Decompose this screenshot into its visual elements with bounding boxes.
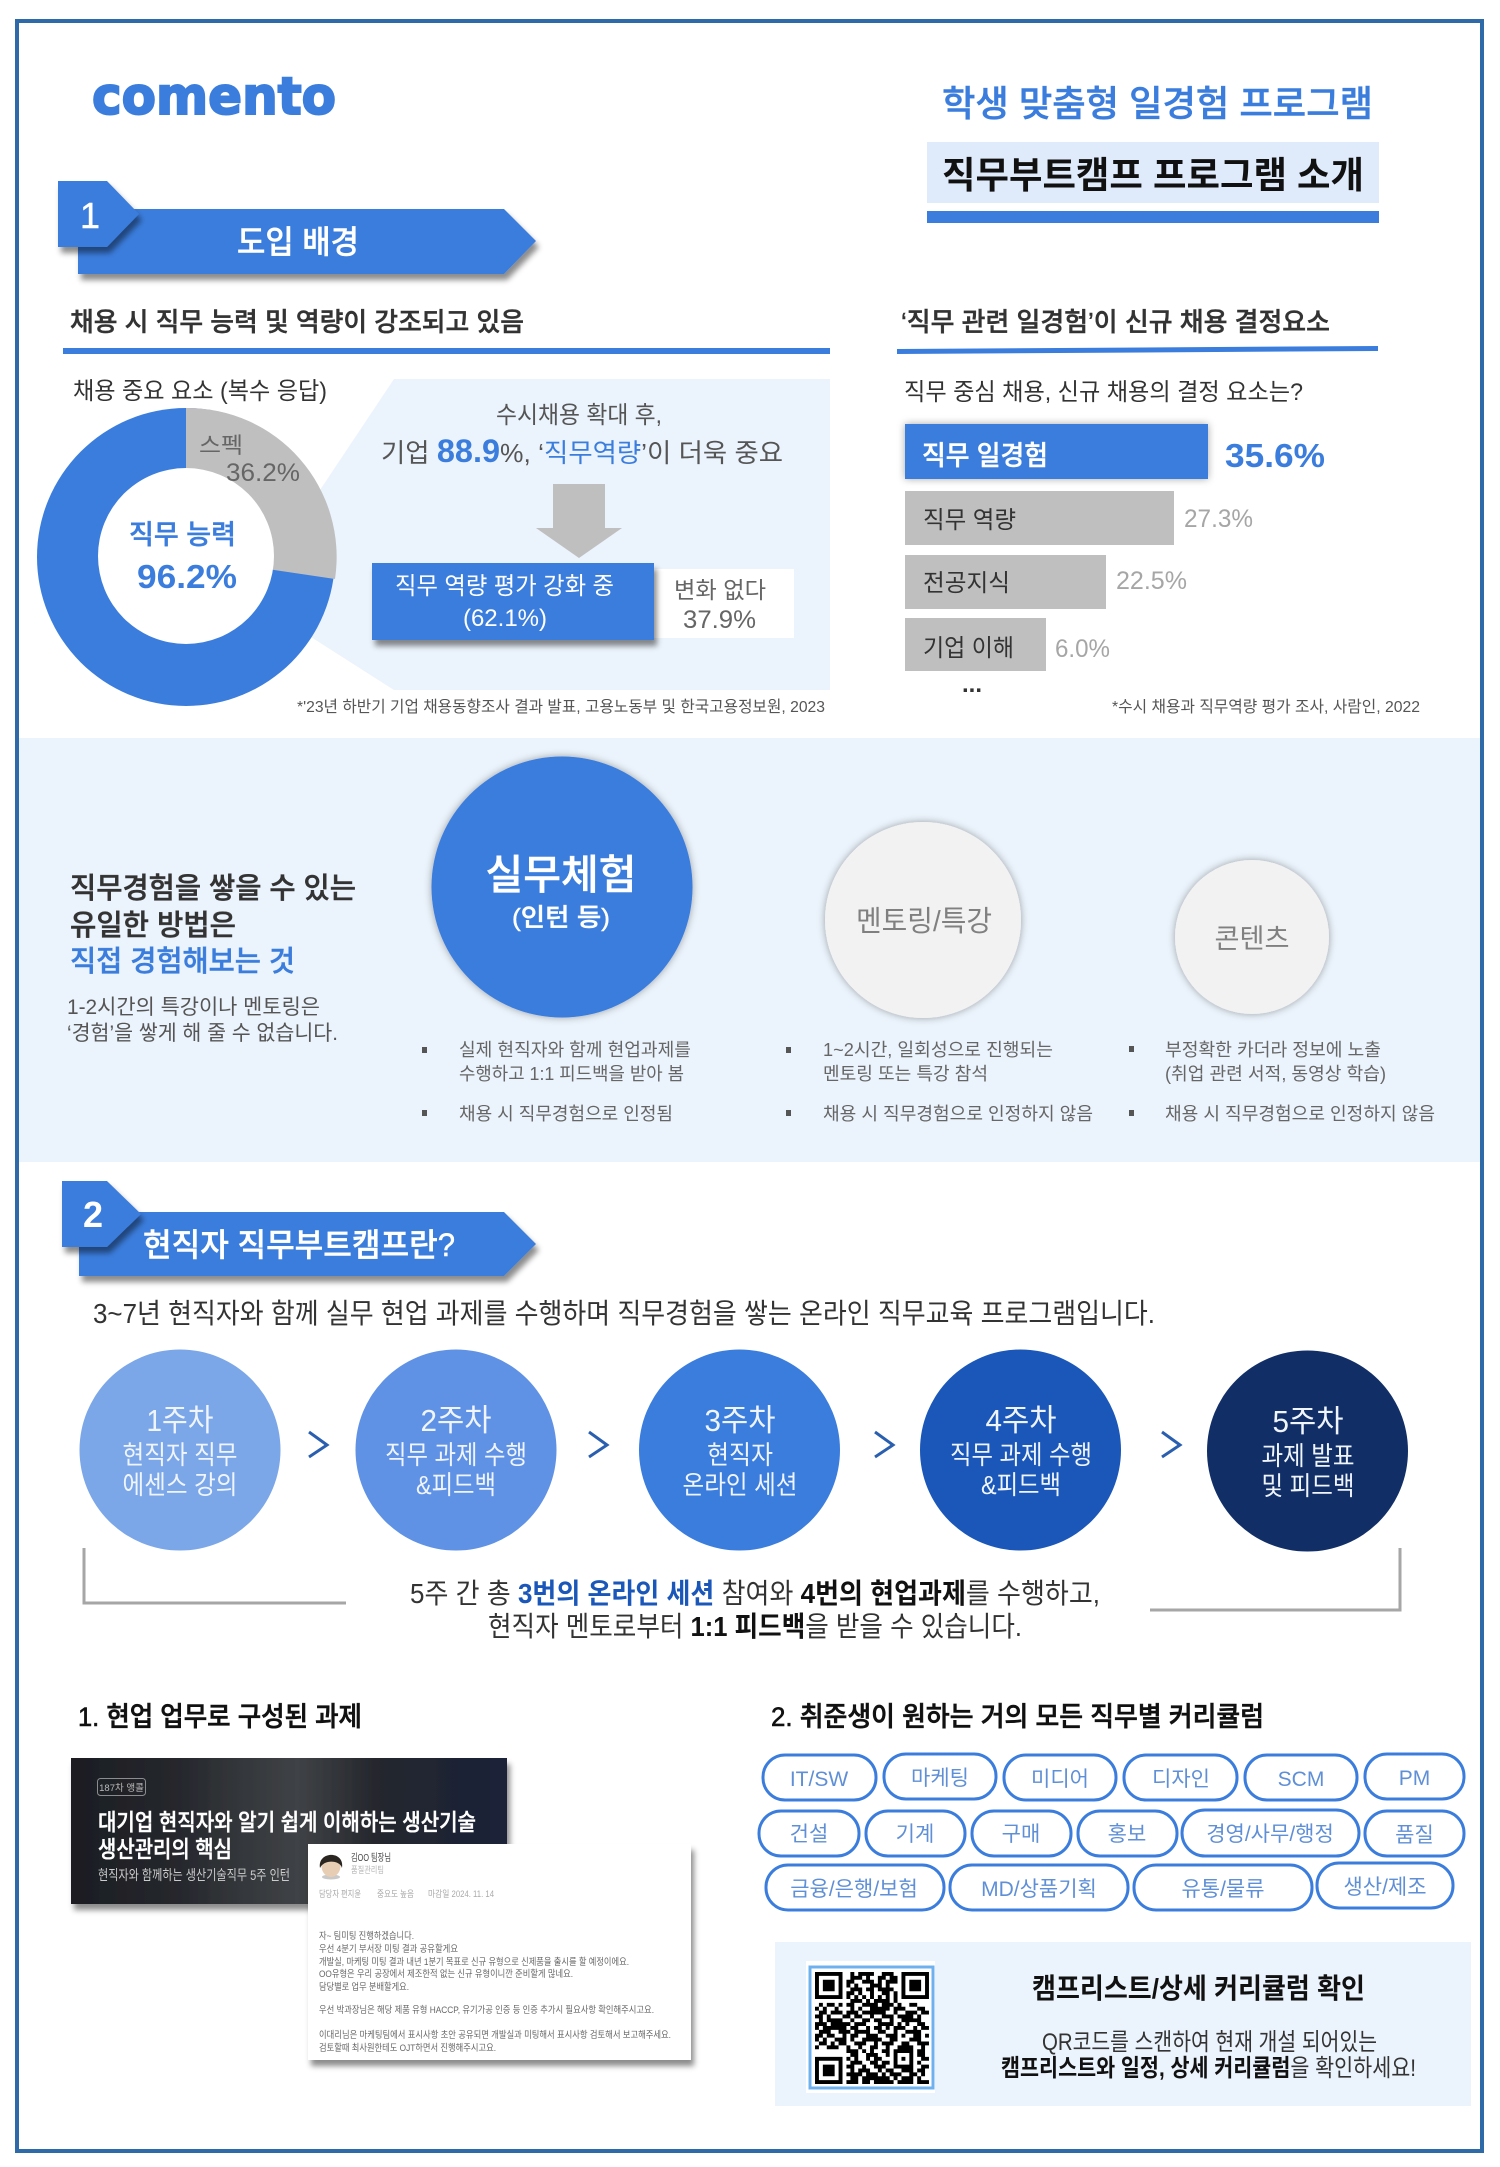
title box [927,142,1379,203]
task card: 담당별로 업무 분배할게요. [319,1981,409,1993]
banner label: 도입 배경 [237,224,359,260]
week 3: 온라인 세션 [682,1470,798,1500]
bullets: mentoring: 1~2시간, 일회성으로 진행되는 [823,1040,1053,1060]
section 2 intro: 3~7년 현직자와 함께 실무 현업 과제를 수행하며 직무경험을 쌓는 온라인 직무교육 프로그램입니다. [93,1298,1155,1329]
task card: 우선 4분기 부서장 미팅 결과 공유할게요 [319,1944,458,1955]
band: experience comparison [19,738,1480,1162]
arrow: week 4 to 5 [1162,1432,1180,1457]
course subtitle: 현직자와 함께하는 생산기술직무 5주 인턴 [98,1867,290,1883]
tag row 3: 유통/물류 [1181,1878,1265,1901]
number tab [62,1181,141,1247]
logo: comento: comento [92,67,336,127]
donut chart [37,408,337,706]
bar chart: 전공지식 [923,570,1010,597]
callout text: 기업 88.9%, ‘직무역량’이 더욱 중요 [381,433,783,469]
callout text [381,402,783,469]
bracket: left [84,1548,346,1603]
arrow: week 2 to 3 [589,1432,607,1457]
bar chart: 기업 이해 [923,635,1014,662]
course banner: 생산관리의 핵심 [98,1836,232,1862]
tag row 1: 미디어 [1031,1768,1089,1791]
week 3 [639,1350,840,1550]
bar chart: 직무 역량 [923,507,1016,534]
result box: no change: 37.9% [683,606,756,634]
result box: no change: 변화 없다 [674,577,766,603]
circle: internship: 실무체험 [486,852,636,898]
bullets: contents [1129,1040,1435,1124]
tag row 2: 홍보 [1108,1823,1146,1846]
bar: major knowledge [905,555,1106,609]
bar: competency [905,491,1174,545]
meta row: 중요도 높음 [377,1889,414,1899]
donut chart label: 채용 중요 요소 (복수 응답) [73,378,327,405]
ellipsis: ... [962,671,982,698]
task card [308,1844,691,2060]
title: program label: 학생 맞춤형 일경험 프로그램 [942,83,1373,124]
banner bar [78,209,536,274]
callout wedge panel [300,379,830,690]
week 5: 5주차 [1272,1404,1344,1439]
donut label: competency: 직무 능력 [129,520,236,550]
course banner: 187차 앵콜 [99,1782,144,1794]
banner label: 현직자 직무부트캠프란? [143,1227,455,1263]
heading: new hire factors: ‘직무 관련 일경험’이 신규 채용 결정요소 [901,307,1330,337]
tag row 2: 경영/사무/행정 [1206,1823,1334,1846]
program summary: 현직자 멘토로부터 1:1 피드백을 받을 수 있습니다. [488,1611,1022,1642]
course banner [71,1758,507,1904]
course title: 대기업 현직자와 알기 쉽게 이해하는 생산기술 [98,1809,476,1835]
QR code [806,1961,935,2093]
week 4: 4주차 [986,1403,1056,1438]
week 2: 2주차 [420,1403,492,1438]
donut value: competency: 96.2% [137,558,237,595]
bullets: internship [422,1040,691,1124]
title block [927,83,1379,223]
bar chart: 6.0% [1055,635,1110,663]
arrow: down [536,484,622,558]
heading: assignments: 1. 현업 업무로 구성된 과제 [78,1702,362,1732]
badge [98,1778,146,1796]
footnote: right source: *수시 채용과 직무역량 평가 조사, 사람인, 2022 [1112,698,1420,716]
meta row: 마감일 2024. 11. 14 [428,1888,494,1899]
title: program intro: 직무부트캠프 프로그램 소개 [942,155,1364,196]
QR panel: 캠프리스트와 일정, 상세 커리큘럼을 확인하세요! [1001,2055,1416,2082]
bar chart: 22.5% [1116,567,1187,595]
result box: strengthened [372,563,654,640]
week 1: 현직자 직무 [122,1440,238,1470]
bar chart: 35.6% [1225,437,1325,474]
meta row [319,1888,494,1899]
circle: internship [432,756,692,1018]
week 5: 및 피드백 [1262,1471,1354,1501]
number 2: 2 [83,1194,103,1235]
band description: 1-2시간의 특강이나 멘토링은 [67,996,320,1019]
QR description: QR코드를 스캔하여 현재 개설 되어있는 [1042,2029,1377,2056]
heading: curriculum: 2. 취준생이 원하는 거의 모든 직무별 커리큘럼 [771,1702,1264,1732]
result box: strengthened: 직무 역량 평가 강화 중 [395,573,614,600]
bullets: internship: 수행하고 1:1 피드백을 받아 봄 [459,1064,684,1084]
tag row 2: 기계 [896,1823,934,1846]
band heading: 직접 경험해보는 것 [70,945,295,978]
tag row 3: MD/상품기획 [981,1878,1097,1901]
week 5 [1207,1350,1408,1552]
week 2: &피드백 [416,1470,496,1500]
tag row 3: 생산/제조 [1343,1876,1427,1899]
heading: new hire factors [897,307,1378,354]
tag row 1: 디자인 [1152,1768,1210,1791]
task card: OO유형은 우리 공장에서 제조한적 없는 신규 유형이니깐 준비할게 많네요. [319,1968,573,1980]
week 1: 1주차 [146,1403,214,1438]
band heading [70,872,356,978]
QR heading: 캠프리스트/상세 커리큘럼 확인 [1032,1973,1365,2004]
bullets: internship: 채용 시 직무경험으로 인정됨 [459,1104,673,1124]
week 2: 직무 과제 수행 [385,1440,527,1470]
title underline [927,211,1379,223]
banner bar [79,1212,536,1276]
week 3: 3주차 [704,1403,776,1438]
number tab [58,181,139,247]
message: 자~ 팀미팅 진행하겠습니다. [319,1930,414,1942]
week 4: 직무 과제 수행 [950,1440,1092,1470]
bullets: mentoring [786,1040,1093,1124]
tag row 2: 구매 [1002,1823,1040,1846]
bar chart: 직무 일경험 [922,441,1048,471]
bullets: mentoring: 멘토링 또는 특강 참석 [823,1064,988,1084]
arrow: week 1 to 2 [309,1432,327,1457]
band heading: 직무경험을 쌓을 수 있는 [70,872,356,905]
bullets: contents: 채용 시 직무경험으로 인정하지 않음 [1165,1104,1435,1124]
bracket: right [1150,1548,1400,1610]
task card: 우선 박과장님은 해당 제품 유형 HACCP, 유기가공 인증 등 인증 추가시 필요사항 확인해주시고요. [319,2004,654,2016]
week 5: 과제 발표 [1262,1441,1354,1471]
tag row 2: 건설 [790,1823,828,1846]
heading: hiring competency: 채용 시 직무 능력 및 역량이 강조되고 있음 [70,307,524,337]
band description: ‘경험’을 쌓게 해 줄 수 없습니다. [67,1022,338,1045]
number 1: 1 [80,195,100,236]
bullets: internship: 실제 현직자와 함께 현업과제를 [459,1040,691,1060]
circle: internship: (인턴 등) [512,904,610,932]
bar: company understanding [905,618,1046,671]
bar chart title: 직무 중심 채용, 신규 채용의 결정 요소는? [904,379,1303,406]
job tags [759,1754,1464,1910]
tag row 1: 마케팅 [911,1767,969,1790]
circle: contents [1175,860,1329,1014]
band description [67,996,338,1045]
circle: mentoring: 멘토링/특강 [856,906,992,938]
week 1 [80,1350,280,1550]
week 1: 에센스 강의 [122,1470,238,1500]
bullets: contents: 부정확한 카더라 정보에 노출 [1165,1040,1381,1060]
band heading: 유일한 방법은 [70,909,236,942]
author: 김OO 팀장님 [351,1852,391,1864]
task card: 개발실, 마케팅 미팅 결과 내년 1분기 목표로 신규 유형으로 신제품을 출시를 할 예정이에요. [319,1957,629,1968]
callout text: 수시채용 확대 후, [496,402,662,429]
week 4 [920,1350,1121,1550]
tag row 2: 품질 [1395,1824,1434,1847]
tag row 2 [759,1810,1464,1856]
task card: 품질관리팀 [351,1864,384,1875]
footnote: left source: *'23년 하반기 기업 채용동향조사 결과 발표, 고용노동부 및 한국고용정보원, 2023 [297,698,825,716]
program summary [410,1578,1100,1642]
section 1 banner [58,181,536,274]
result box: strengthened: (62.1%) [463,605,547,632]
bullets: contents: (취업 관련 서적, 동영상 학습) [1165,1064,1386,1084]
week 3: 현직자 [707,1440,773,1470]
bar chart [905,424,1325,698]
tag row 1 [763,1754,1464,1800]
week 2 [356,1350,556,1550]
tag row 1: PM [1399,1767,1430,1790]
program summary: 5주 간 총 3번의 온라인 세션 참여와 4번의 현업과제를 수행하고, [410,1578,1100,1609]
tag row 3 [766,1863,1453,1910]
bar chart: 27.3% [1184,505,1253,533]
section 2 banner [62,1181,536,1276]
donut value: spec: 36.2% [226,459,300,487]
result box: no change [654,569,794,638]
heading: hiring competency [63,307,830,354]
week 4: &피드백 [981,1470,1061,1500]
meta row: 담당자 편지윤 [319,1888,361,1899]
circle: mentoring [825,822,1021,1018]
QR panel [775,1942,1471,2106]
circle: contents: 콘텐츠 [1214,924,1290,954]
arrow: week 3 to 4 [875,1432,893,1457]
task card: 이대리님은 마케팅팀에서 표시사항 초안 공유되면 개발실과 미팅해서 표시사항 검토해서 보고해주세요. [319,2029,671,2041]
task card: 검토할때 최사원한테도 OJT하면서 진행해주시고요. [319,2042,496,2054]
avatar [320,1855,342,1880]
tag row 1: IT/SW [790,1768,848,1791]
tag row 1: SCM [1278,1768,1324,1791]
tag row 3: 금융/은행/보험 [790,1878,918,1901]
bar: work experience [905,424,1208,479]
donut label: spec: 스펙 [199,433,243,458]
bullets: mentoring: 채용 시 직무경험으로 인정하지 않음 [823,1104,1093,1124]
